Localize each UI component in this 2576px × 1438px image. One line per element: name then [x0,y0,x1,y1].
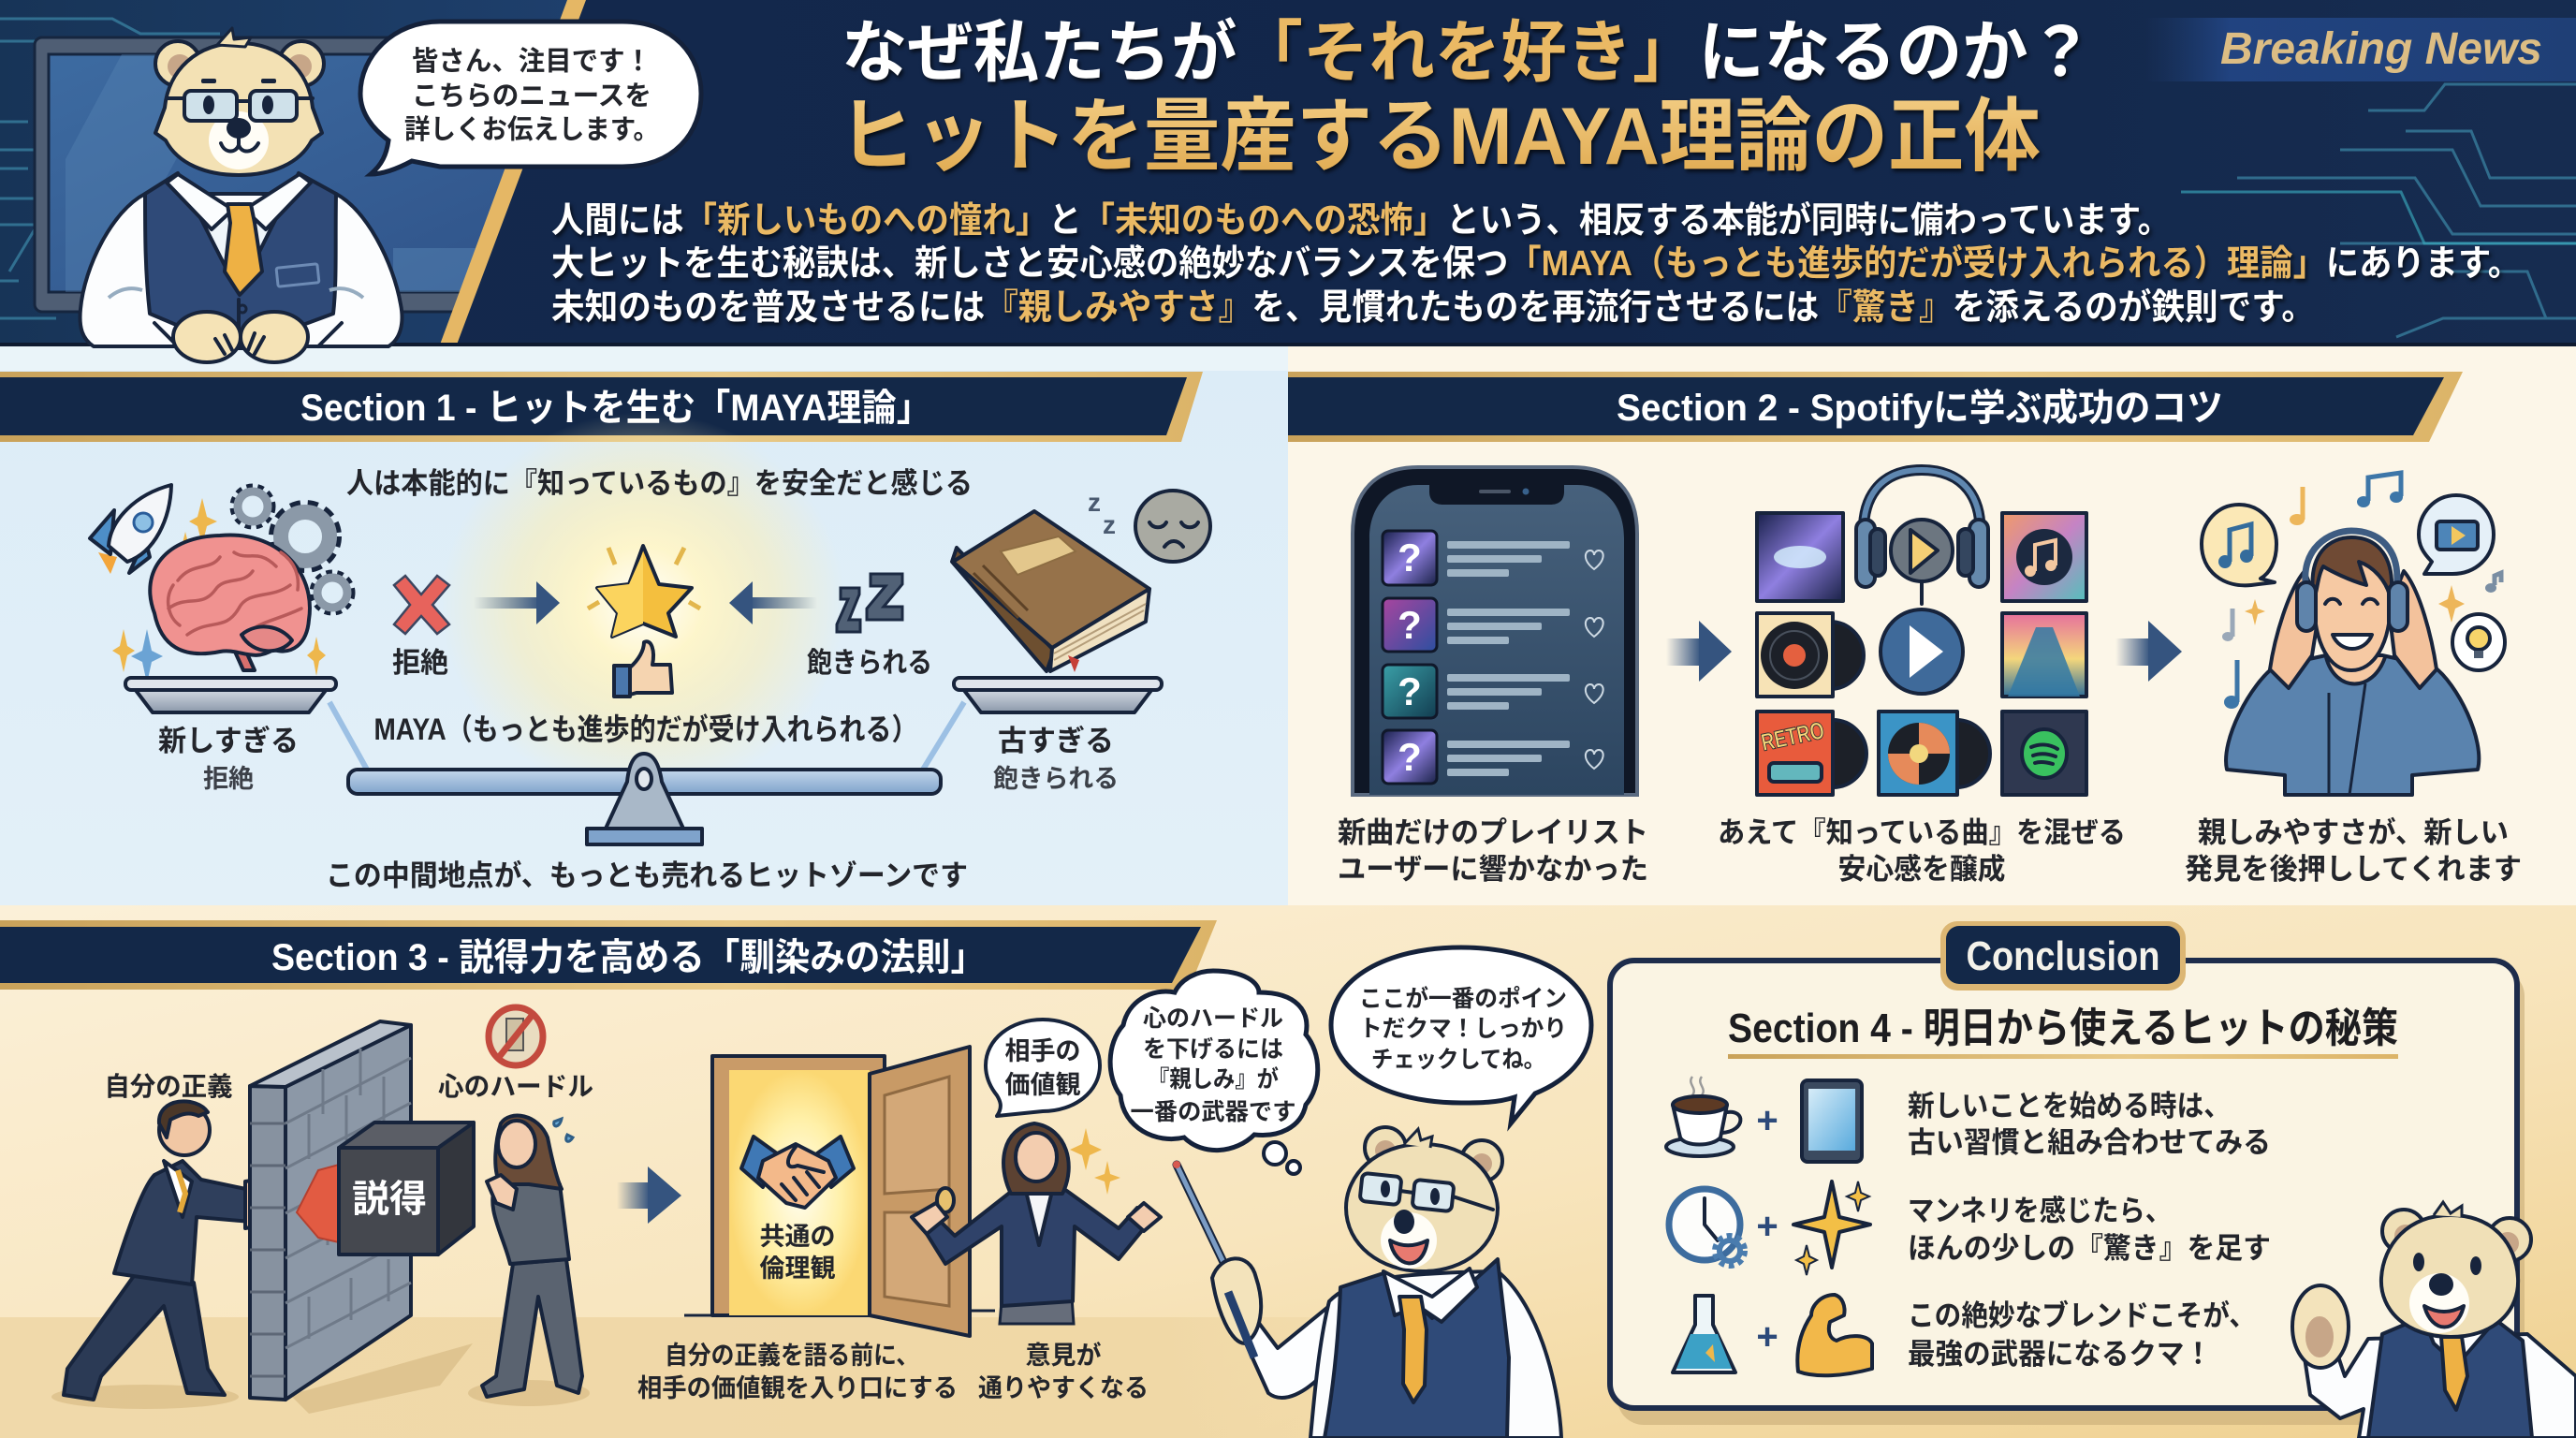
label: mental hurdle: 心のハードル [438,1072,593,1101]
tile: neon road [2002,613,2086,697]
conclusion tab: Conclusion [1966,933,2160,979]
captions section 2: 新曲だけのプレイリスト [1338,816,1648,849]
news desk [0,346,1288,371]
arrow right to star [474,581,560,624]
bubble: thought cloud: を下げるには [1143,1036,1283,1063]
tile: vinyl [1757,613,1864,697]
label: rejection: 拒絶 [392,648,448,679]
bubble: thought cloud: 一番の武器です [1131,1099,1295,1125]
row 2 text: マンネリを感じたら、 [1908,1195,2172,1227]
tile: vinyl blue [1879,712,1990,795]
captions section 2: 安心感を醸成 [1838,853,2005,886]
tile: galaxy [1757,513,1843,601]
playlist row 2 [1383,598,1603,652]
icon: no sign [489,1007,543,1065]
section 1 background [0,346,1288,905]
playlist row 4: ? [1398,735,1422,779]
speech bubble: anchor: 詳しくお伝えします。 [404,114,659,145]
label: common ethics: 共通の [760,1223,835,1251]
section 2 banner [1288,372,2463,442]
row 3 icons [1673,1295,1872,1375]
bubble: thought cloud: 心のハードル [1143,1005,1283,1032]
conclusion tab [1940,921,2186,990]
seesaw [125,678,1162,844]
icon: old book [952,511,1149,672]
woman worried [482,1116,582,1397]
caption top: 人は本能的に『知っているもの』を安全だと感じる [346,467,973,500]
row 1 text [1908,1090,2271,1159]
glow behind star [442,412,844,796]
label: too new: 拒絶 [203,765,254,793]
arrow left to star [729,581,817,624]
music notes [2222,473,2501,709]
tile: retro [1757,712,1866,795]
section 2 background [1288,346,2576,905]
section 4 heading: Section 4 - 明日から使えるヒットの秘策 [1728,1005,2398,1051]
icon: star [588,546,700,637]
label: own justice: 自分の正義 [105,1072,232,1101]
section 3 banner: Section 3 - 説得力を高める「馴染みの法則」 [271,937,986,978]
title [839,16,2094,182]
bubble: partner values: 価値観 [1005,1071,1080,1099]
bubble: teacher: ここが一番のポイン [1359,985,1567,1012]
row 2 text: ほんの少しの『驚き』を足す [1908,1232,2271,1265]
icon: x mark [394,576,449,634]
row 1 icons [1666,1077,1862,1162]
header background [0,0,2576,346]
label: too new: 新しすぎる [158,725,299,757]
section 2 banner: Section 2 - Spotifyに学ぶ成功のコツ [1617,388,2223,429]
caption bottom: この中間地点が、もっとも売れるヒットゾーンです [326,859,968,892]
section 1 banner [0,372,1203,442]
title: ヒットを量産するMAYA理論の正体 [839,92,2041,182]
row 1 icons: + [1756,1100,1778,1141]
captions section 3: 相手の価値観を入り口にする [637,1374,958,1402]
arrow 2 [2115,621,2182,682]
section 3 banner [0,920,1217,990]
bubble: thought cloud: 『親しみ』が [1148,1065,1279,1093]
icon: handshake [741,1137,854,1208]
bear teacher with pointer [1173,1127,1561,1438]
captions section 3: 通りやすくなる [978,1374,1149,1402]
playlist row 1: ? [1398,536,1422,580]
section 1 banner: Section 1 - ヒットを生む「MAYA理論」 [300,388,931,429]
person with headphones [2226,531,2479,795]
row 3 text: この絶妙なブレンドこそが、 [1908,1299,2256,1332]
bubble: partner values: 相手の [1005,1037,1080,1065]
row 3 text: 最強の武器になるクマ！ [1908,1338,2212,1371]
speech bubble: anchor: 皆さん、注目です！ [412,46,651,77]
bubble: teacher: チェックしてね。 [1371,1047,1545,1073]
door [684,1047,995,1336]
bubble: music [2202,505,2276,585]
row 1 text: 新しいことを始める時は、 [1908,1090,2231,1123]
intro text: 大ヒットを生む秘訣は、新しさと安心感の絶妙なバランスを保つ「MAYA（もっとも進歩的だが受け入れられる）理論」にあります。 [551,244,2521,284]
intro text: 未知のものを普及させるには『親しみやすさ』を、見慣れたものを再流行させるには『驚き』を添えるのが鉄則です。 [551,288,2315,328]
icon: sparkles [112,498,326,683]
label: common ethics [760,1223,835,1283]
icon: brain [150,535,310,670]
section 3 and 4 background [0,905,2576,1438]
breaking news tag: Breaking News [2220,24,2542,74]
captions section 2: あえて『知っている曲』を混ぜる [1718,816,2126,849]
label: too old: 飽きられる [993,765,1119,793]
playlist row 3 [1383,665,1603,718]
captions section 2: 発見を後押ししてくれます [2185,853,2522,886]
playlist row 4 [1383,730,1603,784]
woman welcoming [912,1123,1161,1324]
label: bored: 飽きられる [807,648,932,679]
captions section 3 [637,1341,1149,1402]
icon: rocket [90,485,171,574]
panel: section 3 familiarity [0,920,1217,1414]
icon: gears [234,488,351,611]
label: too old: 古すぎる [998,725,1114,757]
phone with playlist [1353,467,1637,795]
intro text: 人間には「新しいものへの憧れ」と「未知のものへの恐怖」という、相反する本能が同時に備わっています。 [551,201,2171,241]
panel: section 2 Spotify [1288,372,2522,886]
tile: streaming logo [2002,712,2086,795]
captions section 2: 親しみやすさが、新しい [2198,816,2509,849]
title: なぜ私たちが「それを好き」になるのか？ [842,16,2094,91]
icon: sleepy moon: z [1088,488,1101,517]
row 2 text [1908,1195,2271,1265]
arrow 1 [1666,621,1732,682]
captions section 3: 意見が [1026,1341,1101,1370]
tile: music note [2002,513,2086,601]
icon: sleepy moon [1088,488,1210,562]
label: too new [158,725,299,793]
block: persuasion: 説得 [352,1179,427,1220]
captions section 2: ユーザーに響かなかった [1338,853,1648,886]
row 2 icons: + [1756,1206,1778,1247]
bubble: partner values [986,1020,1100,1116]
label: MAYA: MAYA（もっとも進歩的だが受け入れられる） [374,712,917,746]
gold diagonal stripe [440,0,586,345]
playlist row 2: ? [1398,603,1422,647]
playlist row 3: ? [1398,669,1422,713]
album tiles grid [1757,513,2086,795]
row 3 text [1908,1299,2256,1371]
floor shadows [51,1343,590,1414]
red arrow [297,1165,339,1242]
bubble: teacher [1331,947,1591,1123]
label: common ethics: 倫理観 [760,1255,835,1283]
panel: section 4 conclusion [1610,921,2525,1425]
bear anchor in header [80,28,402,362]
brick wall [250,1021,411,1400]
captions section 3: 自分の正義を語る前に、 [665,1342,919,1370]
intro text [551,201,2521,328]
block: persuasion [339,1123,474,1255]
bear waving [2292,1202,2576,1438]
bubble: teacher: トだクマ！しっかり [1359,1016,1567,1042]
captions section 2 [1338,816,2522,886]
arrow center [617,1167,681,1224]
playlist row 1 [1383,531,1603,585]
icon: sleepy moon: z [1103,510,1116,539]
icon: zZ [837,574,902,632]
label: too old [993,725,1119,793]
bubble: thought cloud [1110,971,1318,1174]
panel: section 1 MAYA theory [0,372,1210,892]
tv monitor [34,36,505,313]
row 2 icons [1669,1181,1870,1275]
icon: headphones [1856,470,1988,604]
bubble: camera [2419,495,2494,574]
man pushing [64,1101,257,1400]
bubble: bulb [2452,614,2505,670]
speech bubble: anchor [360,22,701,174]
tile: retro: RETRO [1759,715,1827,756]
row 3 icons: + [1756,1316,1778,1357]
speech bubble: anchor: こちらのニュースを [412,81,651,111]
icon: thumbs up [614,641,672,697]
tile: play button [1881,609,1963,694]
row 1 text: 古い習慣と組み合わせてみる [1908,1126,2271,1159]
